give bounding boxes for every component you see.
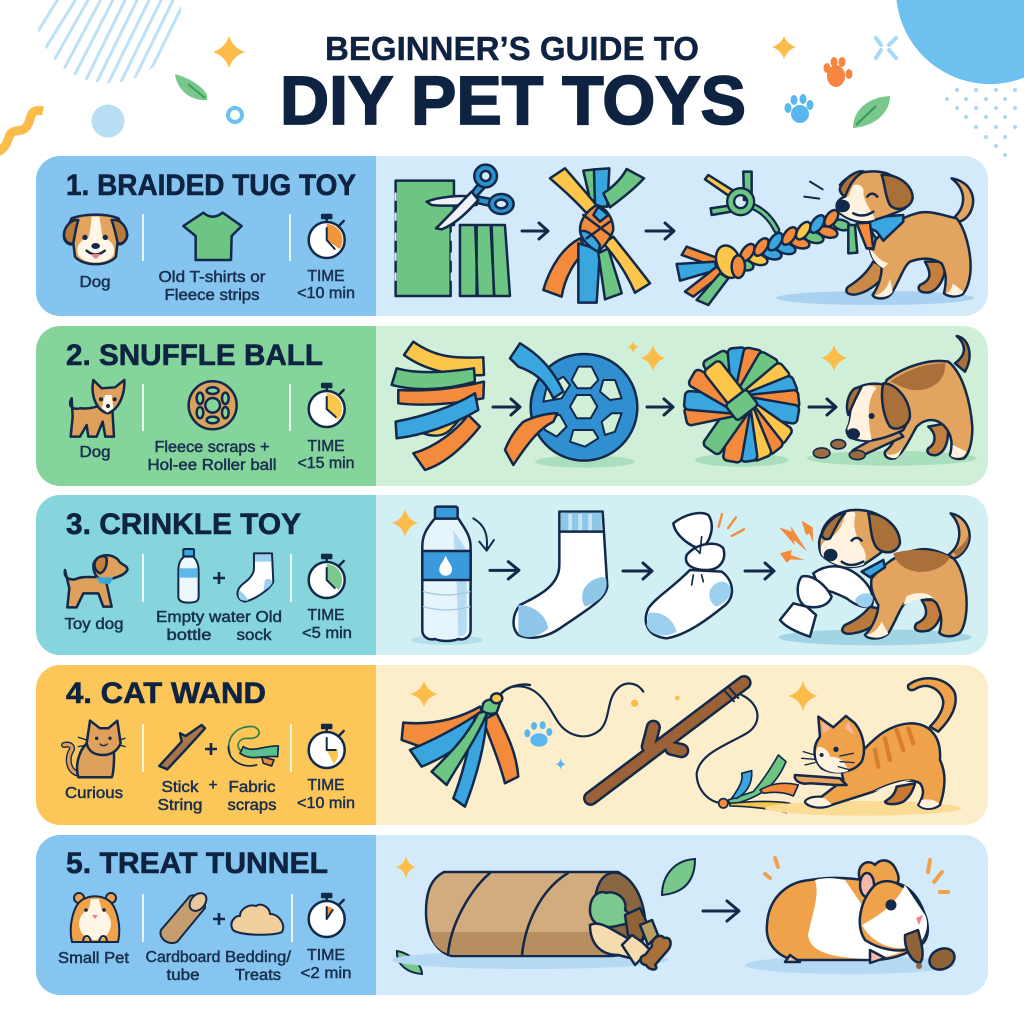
sparkle: [392, 509, 418, 537]
arrow: [809, 399, 836, 415]
label: materials: String: [158, 797, 202, 814]
icon: Hol-ee Roller ball: [189, 381, 237, 429]
label: time: <2 min: [300, 965, 352, 982]
label: materials: Cardboard: [146, 949, 220, 966]
title: [280, 30, 746, 139]
step: finished rope toy: [677, 172, 851, 305]
label: time: [297, 268, 355, 302]
plus: [213, 913, 225, 925]
icon: hamster: [71, 893, 119, 942]
label: time: TIME: [308, 438, 344, 455]
divider: [143, 724, 291, 772]
icon: fabric scraps: [228, 727, 278, 766]
label: materials: Fleece scraps +: [154, 439, 270, 456]
label: time: [302, 607, 352, 642]
label: materials: Old T-shirts or: [158, 269, 266, 286]
label: materials: Fabric: [228, 779, 276, 796]
label: time: [297, 777, 355, 812]
icon: bedding: [231, 905, 283, 935]
arrow: [745, 563, 774, 579]
icon: sitting cat: [64, 721, 125, 777]
icon: stopwatch: [309, 555, 345, 598]
label: materials: [146, 949, 292, 984]
step: ball with fleece: [505, 343, 637, 468]
title: BEGINNER’S GUIDE TO: [325, 30, 699, 67]
sparkle: [788, 681, 818, 711]
plus: [205, 743, 217, 755]
label: materials: Stick: [162, 779, 199, 796]
icon: stopwatch: [309, 725, 345, 768]
step: tied sock: [646, 513, 744, 638]
heading: treat tunnel: 5. TREAT TUNNEL: [66, 847, 328, 880]
leaves: [397, 859, 695, 974]
icon: dog face: [64, 215, 127, 264]
label: materials: [158, 269, 266, 304]
arrow: [646, 223, 674, 239]
icon: water bottle: [178, 549, 199, 603]
heading: crinkle toy: 3. CRINKLE TOY: [66, 508, 301, 541]
string and decor: [513, 684, 680, 769]
shadow under tube: [392, 951, 668, 969]
heading: braided tug toy: 1. BRAIDED TUG TOY: [66, 169, 356, 202]
label: materials: sock: [236, 627, 272, 644]
label: materials: scraps: [228, 797, 277, 814]
label: materials: Treats: [235, 967, 281, 984]
icon: t-shirt: [183, 213, 242, 260]
plus: [213, 572, 225, 584]
sparkle: [396, 856, 416, 879]
icon: toy dog: [65, 555, 127, 607]
step: fabric tassel: [402, 685, 530, 807]
icon: cardboard tube: [160, 890, 210, 943]
label: curious: Curious: [65, 785, 123, 802]
sparkles: [627, 341, 847, 371]
panel: braided tug toy: [36, 156, 988, 316]
label: time: TIME: [308, 777, 344, 794]
divider: [143, 214, 290, 261]
shadow under hamster: [745, 956, 955, 974]
playing cat: [765, 678, 962, 816]
heading: cat wand: 4. CAT WAND: [66, 677, 266, 710]
icon: stopwatch: [309, 215, 345, 258]
dog sniffing treats: [807, 336, 977, 466]
label: time: TIME: [308, 268, 344, 285]
step: stick wand: [591, 683, 798, 813]
panel: crinkle toy: [36, 495, 988, 655]
label: time: <15 min: [298, 455, 354, 472]
step: cut fabric with scissors: [396, 165, 514, 296]
label: time: <10 min: [297, 285, 355, 302]
label: dog: Dog: [80, 444, 110, 461]
label: dog: Dog: [80, 274, 110, 291]
step: cardboard tube with treats: [426, 868, 671, 970]
label: materials: Empty water Old: [156, 609, 282, 626]
title: DIY PET TOYS: [280, 62, 746, 139]
icon: stick: [159, 725, 205, 769]
hamster eating: [765, 858, 958, 974]
label: materials: [156, 609, 282, 644]
label: materials: Hol-ee Roller ball: [148, 457, 276, 474]
label: time: <5 min: [302, 625, 352, 642]
divider: [143, 554, 291, 602]
step: fleece strips: [392, 342, 484, 470]
label: materials: bottle: [166, 627, 212, 644]
label: time: TIME: [307, 947, 345, 964]
label: materials: Fleece strips: [164, 287, 260, 304]
sparkle: [410, 681, 438, 707]
step: finished snuffle ball: [684, 347, 800, 467]
step: braid strips: [543, 168, 650, 303]
arrow: [647, 399, 673, 415]
icon: stopwatch: [309, 384, 345, 427]
label: time: [298, 438, 354, 472]
label: time: [300, 947, 352, 982]
icon: stopwatch: [309, 894, 345, 937]
label: materials: [148, 439, 276, 474]
icon: sock: [238, 553, 273, 602]
label: time: <10 min: [297, 795, 355, 812]
label: materials: +: [208, 777, 218, 794]
label: toy dog: Toy dog: [64, 616, 124, 633]
divider: [143, 384, 290, 431]
step: sock: [514, 512, 607, 638]
panel: cat wand: [36, 665, 988, 825]
decorative background shapes: [0, 0, 1024, 157]
label: small pet: Small Pet: [58, 950, 130, 967]
arrow: [522, 223, 548, 239]
arrow: [703, 901, 739, 921]
label: materials: tube: [166, 967, 200, 984]
label: materials: [158, 777, 277, 814]
label: time: TIME: [308, 607, 344, 624]
arrow: [623, 563, 652, 579]
label: materials: Bedding/: [225, 949, 292, 966]
panel: snuffle ball: [36, 326, 988, 486]
step: water bottle: [411, 507, 519, 645]
shadow under dog: [776, 291, 974, 305]
heading: snuffle ball: 2. SNUFFLE BALL: [66, 339, 323, 372]
dog with crinkle toy: [778, 510, 972, 645]
divider: [143, 894, 292, 942]
icon: chihuahua: [70, 380, 124, 437]
arrow: [493, 399, 520, 415]
panel: treat tunnel: [36, 835, 988, 995]
dog tugging rope: [804, 171, 973, 299]
